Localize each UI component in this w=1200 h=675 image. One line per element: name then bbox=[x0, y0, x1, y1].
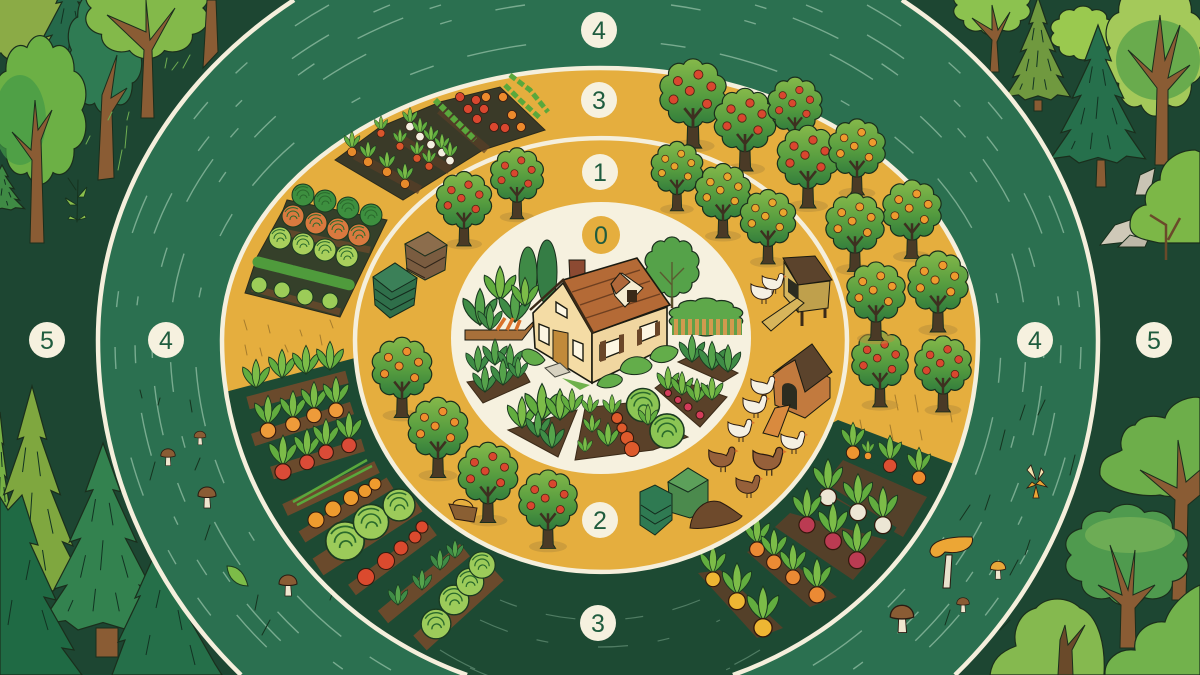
number badge: zone 4 top bbox=[581, 12, 617, 48]
cypress and tree behind house bbox=[519, 237, 699, 308]
butterfly bbox=[1027, 465, 1047, 498]
panel: zone 5 forest, lower right bbox=[990, 397, 1200, 675]
number badge: zone 5 left: 5 bbox=[40, 327, 54, 355]
panel: zone 5 forest, upper right bbox=[954, 0, 1200, 260]
chicken coop, lower bbox=[763, 344, 832, 437]
panel: zone 3 ring bbox=[222, 68, 978, 675]
raised bed bbox=[463, 266, 538, 340]
number badge: zone 3 top: 3 bbox=[592, 87, 606, 115]
panel: zone 5 forest, upper left bbox=[0, 0, 218, 243]
herb bed left bbox=[466, 339, 530, 403]
chicken coop, upper bbox=[762, 256, 832, 331]
beet bed bbox=[655, 367, 727, 427]
number badge: zone 0: 0 bbox=[594, 222, 608, 250]
number badge: zone 4 top: 4 bbox=[592, 17, 606, 45]
zone 3 lower dark band bbox=[225, 358, 975, 675]
leafy bed lower left bbox=[507, 384, 583, 457]
garden beds: zone 3 upper left bbox=[245, 75, 548, 317]
number badge: zone 0 bbox=[582, 216, 620, 254]
number badge: zone 1 top: 1 bbox=[593, 159, 607, 187]
number badge: zone 4 left bbox=[148, 322, 184, 358]
fruit trees: zone 1 bbox=[372, 141, 796, 552]
number badge: zone 3 top bbox=[581, 82, 617, 118]
bottom right bush bbox=[1105, 585, 1200, 675]
panel: zone 5 forest, lower left bbox=[0, 386, 222, 675]
number badge: zone 5 left bbox=[29, 322, 65, 358]
number badge: zone 3 bottom: 3 bbox=[591, 610, 605, 638]
mushrooms, leaf and butterfly in zone 4 bbox=[161, 431, 1047, 633]
bottom tree bbox=[990, 599, 1104, 675]
dark pine, far left bbox=[0, 495, 82, 675]
number badge: zone 4 right: 4 bbox=[1028, 327, 1042, 355]
number badge: zone 4 left: 4 bbox=[159, 327, 173, 355]
compost bins and pile, lower right of zone 1 bbox=[640, 468, 742, 535]
number badge: zone 5 right bbox=[1136, 322, 1172, 358]
number badge: zone 2 bbox=[582, 502, 618, 538]
fruit trees: zone 3 orchard bbox=[660, 59, 971, 416]
garden beds: zone 3 lower left bbox=[243, 341, 497, 643]
hedge and fence bbox=[669, 298, 743, 336]
large orange mushroom bbox=[930, 537, 973, 588]
number badge: zone 2: 2 bbox=[593, 507, 607, 535]
basket bbox=[449, 499, 477, 522]
garden beds: zone 3 lower right bbox=[698, 422, 931, 638]
leaf bbox=[227, 566, 248, 586]
number badge: zone 1 top bbox=[582, 154, 618, 190]
panel: zone 1 ring bbox=[355, 138, 847, 572]
vegetable bed lower centre bbox=[575, 388, 688, 460]
number badge: zone 4 right bbox=[1017, 322, 1053, 358]
compost bins, upper left of zone 1 bbox=[373, 232, 447, 318]
number badge: zone 5 right: 5 bbox=[1147, 327, 1161, 355]
house bbox=[521, 258, 678, 390]
carrot bed bbox=[678, 335, 741, 382]
panel: zone 0 home garden bbox=[451, 202, 751, 474]
dark pine, near ring bbox=[112, 535, 222, 675]
number badge: zone 3 bottom bbox=[580, 605, 616, 641]
chickens bbox=[709, 273, 808, 498]
